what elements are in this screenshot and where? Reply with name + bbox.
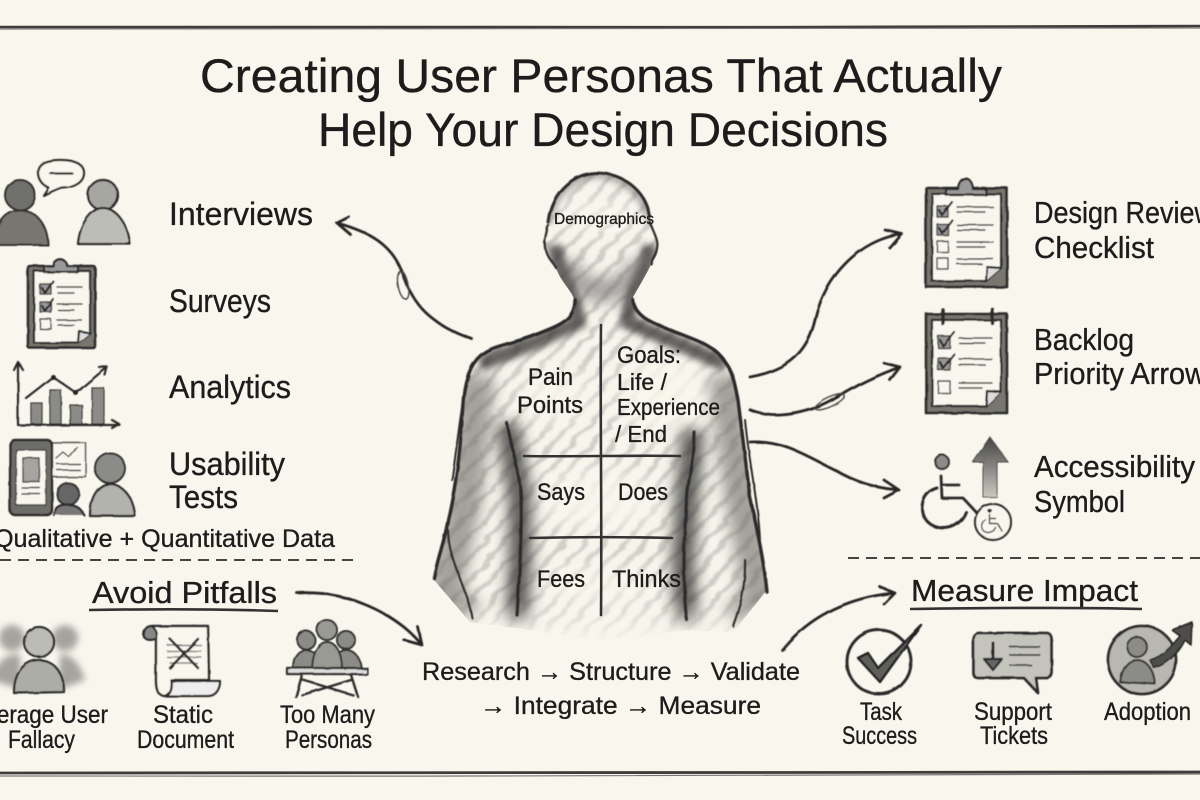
label: qualitative plus quantitative data: Qualitative + Quantitative Data (0, 525, 335, 553)
arrow: persona to backlog (750, 363, 900, 415)
icon: backlog clipboard (926, 309, 1007, 413)
persona labels: Fees (537, 566, 585, 593)
label: support tickets: Support (974, 698, 1052, 726)
label: accessibility symbol: Symbol (1034, 484, 1125, 519)
icon: survey clipboard (28, 259, 95, 348)
icon: too many personas (287, 620, 367, 697)
persona labels: Does (618, 479, 668, 506)
icon: usability test (10, 440, 135, 516)
arrow: pitfalls to process (297, 593, 422, 645)
title: Creating User Personas That Actually (200, 49, 1003, 102)
icon: design review clipboard (926, 178, 1007, 287)
label: analytics: Analytics (169, 369, 291, 405)
heading: avoid pitfalls: Avoid Pitfalls (92, 575, 277, 610)
persona labels: Says (537, 479, 585, 506)
icon: average user (0, 625, 85, 693)
process flow text (422, 658, 800, 720)
persona labels: Points (517, 392, 583, 419)
persona labels: Pain (528, 364, 573, 391)
label: adoption: Adoption (1104, 698, 1191, 726)
torso shading and hatch (434, 174, 766, 640)
heading: measure impact: Measure Impact (911, 573, 1138, 608)
light patches behind text (520, 201, 713, 604)
title: Help Your Design Decisions (318, 103, 888, 156)
label: usability tests (169, 446, 285, 515)
label: support tickets: Tickets (980, 722, 1048, 750)
label: too many personas: Personas (285, 726, 372, 754)
label: too many personas: Too Many (280, 701, 375, 729)
persona labels: Life / (617, 369, 668, 395)
icon: adoption (1108, 622, 1192, 694)
arrow: process to measure impact (782, 587, 895, 650)
label: support tickets (974, 698, 1052, 750)
label: static document (137, 701, 234, 754)
icon: analytics chart (14, 362, 119, 428)
icon: interviews (0, 160, 130, 245)
persona labels: Thinks (612, 566, 681, 593)
label: too many personas (280, 701, 375, 754)
arrow: persona to design review checklist (750, 230, 902, 377)
persona labels: Goals: (617, 342, 681, 369)
label: usability tests: Usability (169, 446, 285, 482)
arrow: persona to accessibility (750, 442, 899, 498)
process flow text: → Integrate → Measure (480, 692, 761, 720)
icon: support tickets (973, 633, 1052, 693)
label: average user fallacy (0, 701, 108, 754)
label: task success: Success (842, 722, 917, 750)
label: design review checklist (1034, 195, 1200, 265)
label: backlog priority arrow: Backlog (1034, 322, 1134, 357)
persona labels: Experience (617, 394, 720, 420)
label: static document: Document (137, 726, 234, 754)
central torso figure (432, 170, 770, 640)
icon: static document scroll (144, 626, 220, 696)
persona labels (517, 211, 720, 593)
icon: accessibility symbol (922, 437, 1011, 540)
persona labels: Demographics (554, 211, 654, 228)
torso outline (434, 173, 767, 626)
label: accessibility symbol (1034, 449, 1195, 519)
label: task success (842, 698, 917, 750)
bottom border stroke (0, 772, 1200, 776)
arrow: persona to interviews (337, 217, 472, 339)
label: interviews: Interviews (169, 196, 313, 232)
persona labels: / End (615, 421, 667, 447)
top border stroke (0, 26, 1200, 29)
label: usability tests: Tests (169, 479, 238, 515)
label: static document: Static (153, 701, 213, 729)
label: design review checklist: Checklist (1034, 230, 1154, 265)
persona grid lines (524, 325, 680, 615)
label: task success: Task (860, 698, 902, 726)
label: surveys: Surveys (169, 283, 271, 319)
label: accessibility symbol: Accessibility (1034, 449, 1195, 484)
label: backlog priority arrow (1034, 322, 1200, 391)
title (200, 49, 1003, 156)
process flow text: Research → Structure → Validate (422, 658, 800, 686)
label: average user fallacy: Fallacy (8, 726, 75, 754)
icon: task success (847, 625, 921, 694)
